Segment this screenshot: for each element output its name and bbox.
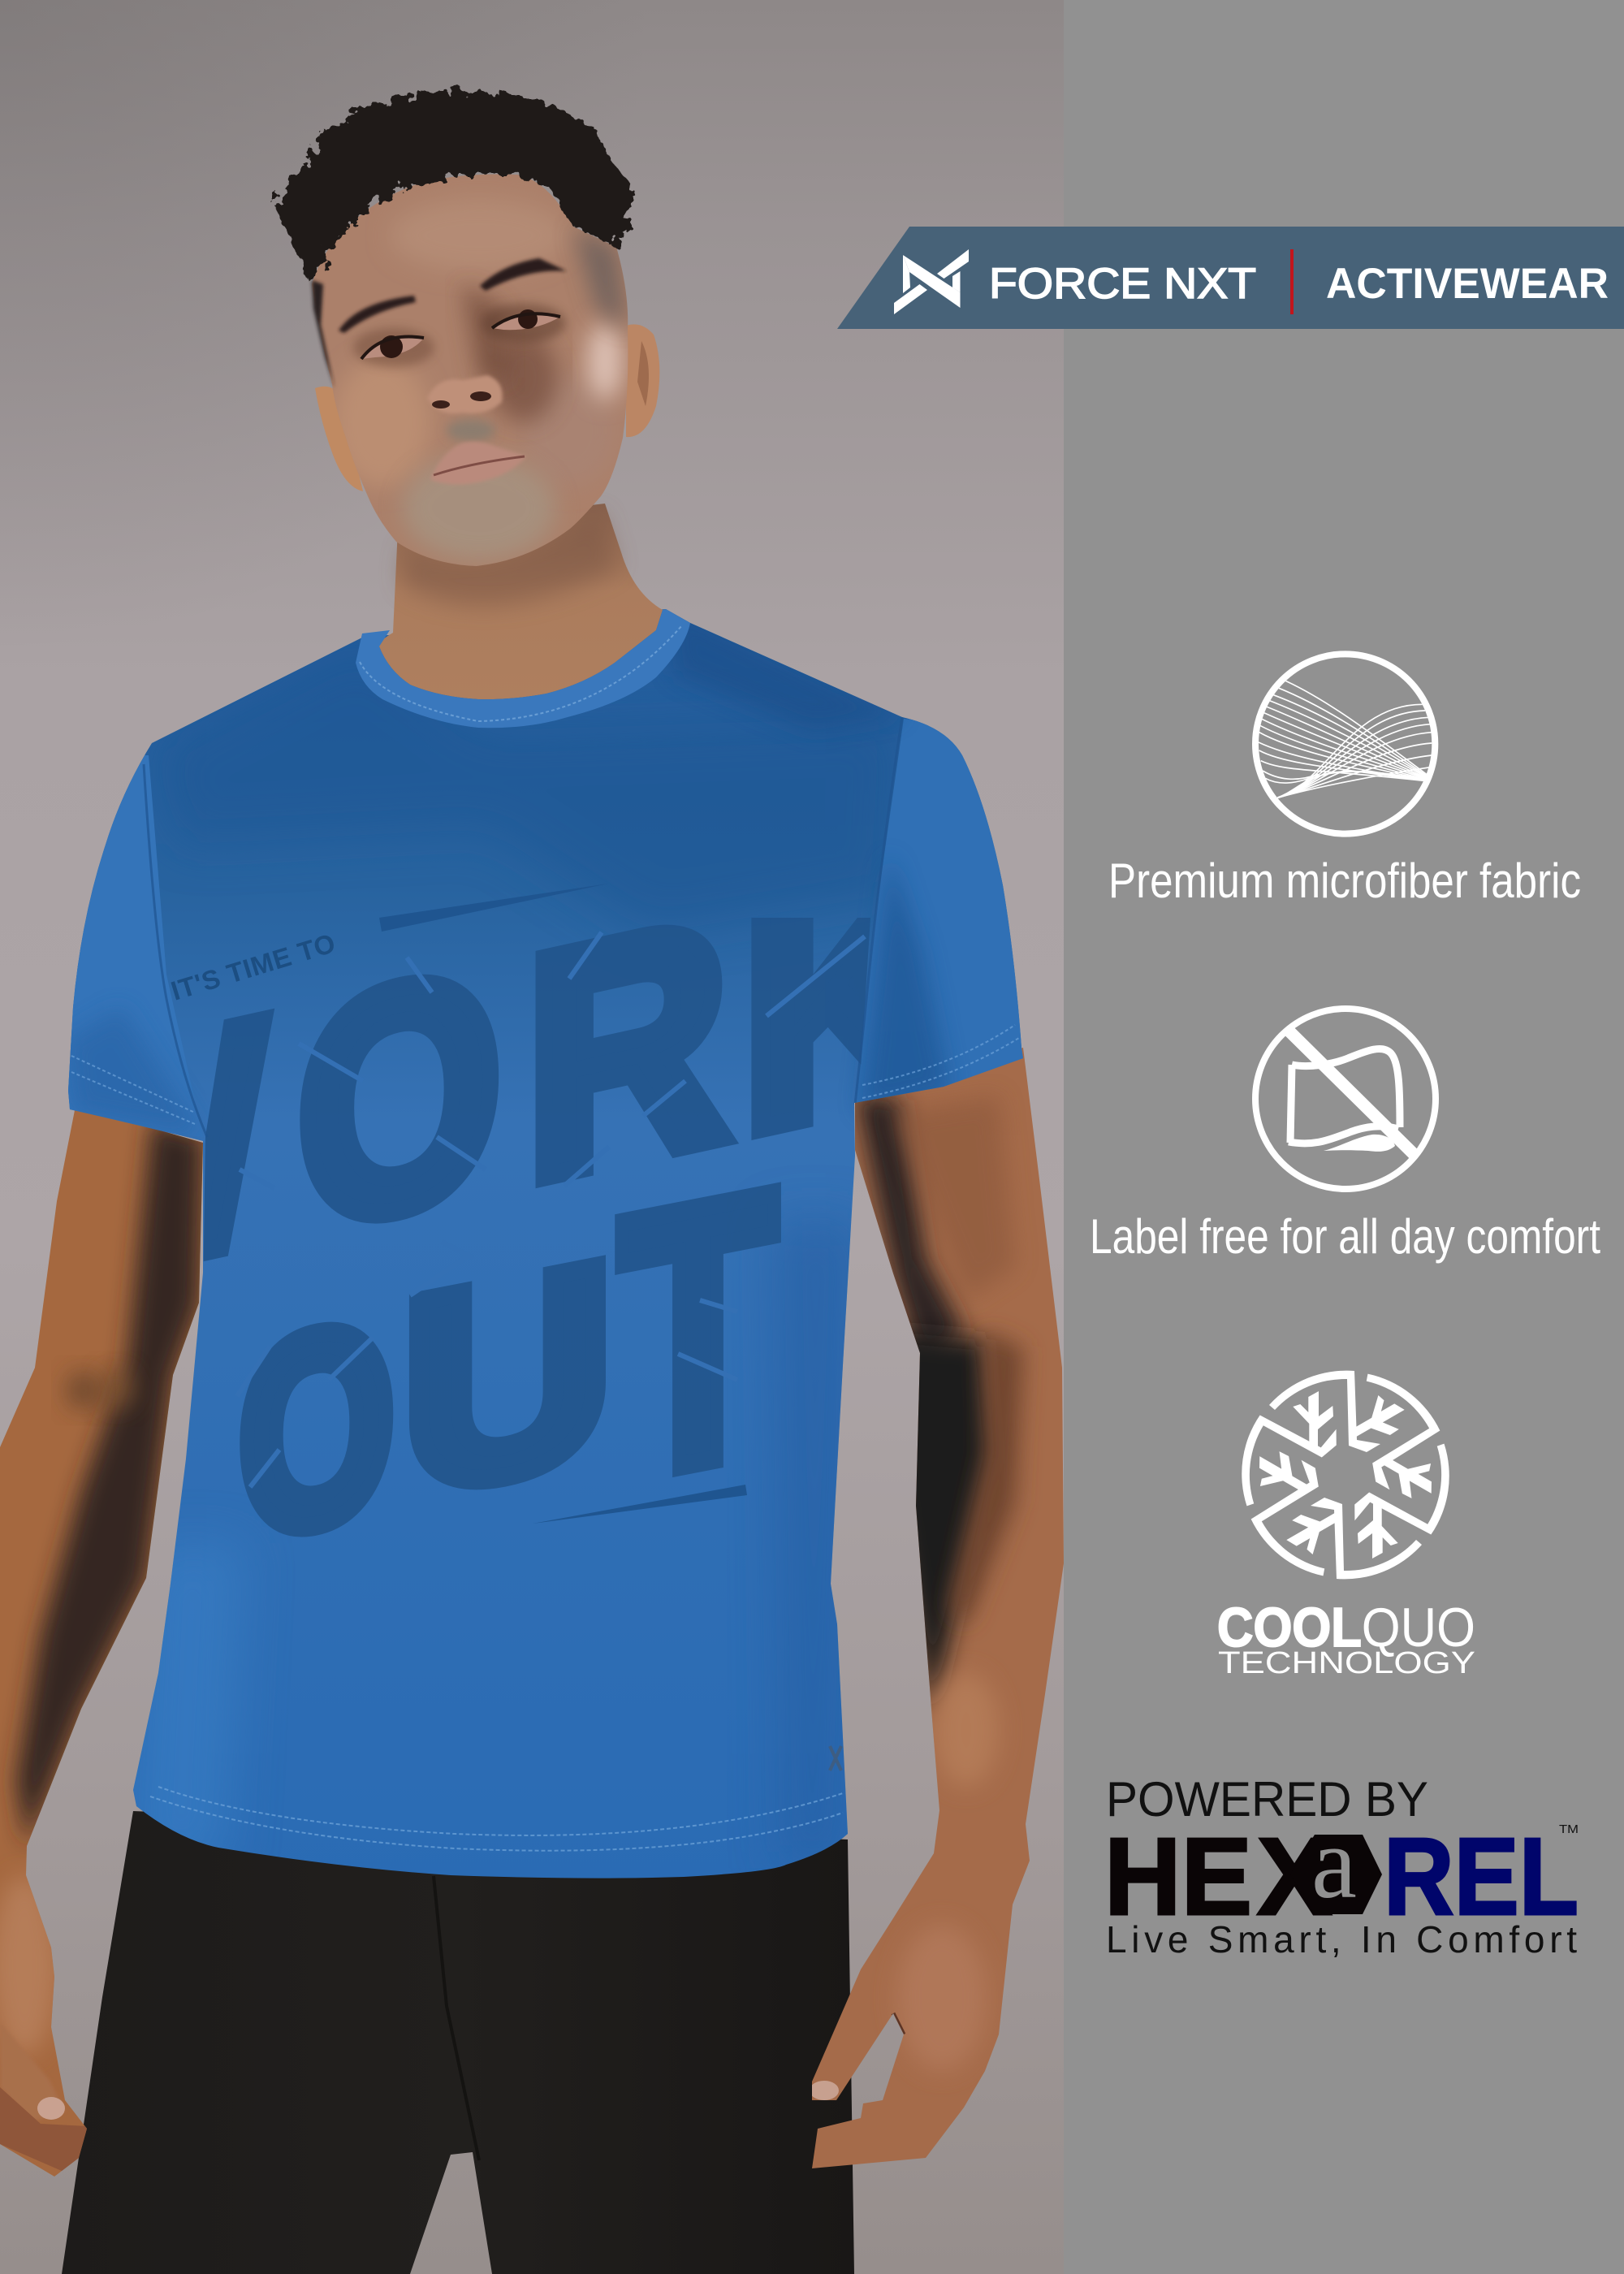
feature: microfiber	[1108, 654, 1581, 908]
print: tagline: IT'S TIME TO	[167, 927, 341, 1006]
print: swooshes	[379, 884, 747, 1524]
shirt shading	[49, 601, 1039, 1868]
t-shirt	[38, 601, 1039, 1900]
hexarel wordmark: REL	[1384, 1815, 1579, 1938]
logo: Force NXT mark	[894, 249, 969, 314]
print: WORK lettering: O	[297, 898, 502, 1298]
icon: snowflake wheel	[1217, 1356, 1474, 1593]
small chest logo on hem	[830, 1746, 841, 1770]
powered by text: POWERED BY	[1106, 1772, 1428, 1827]
banner: brand strip	[837, 227, 1624, 329]
lips	[430, 442, 526, 484]
category name: ACTIVEWEAR	[1326, 260, 1609, 308]
sleeve seams and stitching	[71, 717, 1019, 1851]
face	[300, 162, 641, 577]
feature: coolquo	[1217, 1356, 1475, 1680]
icon: crossed-out label	[1255, 1009, 1436, 1189]
left arm and hand	[0, 1088, 211, 2185]
shirt print	[203, 918, 870, 1537]
photo background	[0, 0, 1064, 2274]
print: OUT lettering: U	[402, 1204, 613, 1553]
print: fracture lines	[237, 932, 865, 1487]
hexarel wordmark: X	[1257, 1815, 1332, 1938]
right grey panel	[1064, 0, 1624, 2274]
brand name: FORCE NXT	[989, 260, 1256, 308]
powered by hexarel	[1104, 1772, 1579, 1961]
hexarel wordmark: a	[1311, 1807, 1357, 1920]
technology line: TECHNOLOGY	[1218, 1646, 1475, 1680]
collar	[356, 609, 690, 728]
hexarel wordmark	[1104, 1807, 1579, 1938]
icon: microfiber weave	[1255, 654, 1435, 834]
print: OUT lettering: T	[619, 1112, 777, 1557]
shorts	[62, 1811, 854, 2274]
tagline: Live Smart, In Comfort	[1106, 1918, 1577, 1961]
left eyebrow	[339, 296, 416, 333]
right eye	[492, 309, 560, 330]
ears	[315, 387, 363, 491]
right arm and hand	[810, 1040, 1072, 2177]
coolquo wordmark: COOLQUO	[1217, 1597, 1475, 1658]
left eye	[361, 335, 424, 359]
hexarel wordmark: TM	[1559, 1822, 1579, 1836]
print: WORK lettering: K	[741, 798, 958, 1200]
print: OUT lettering	[240, 1182, 781, 1537]
hair	[274, 90, 632, 284]
print: WORK lettering: W	[38, 952, 267, 1356]
right eyebrow	[480, 258, 567, 291]
print: OUT lettering: O	[239, 1261, 395, 1596]
red divider	[1290, 249, 1294, 314]
left sideburn fade	[312, 280, 335, 388]
print: WORK lettering	[203, 918, 870, 1261]
print: WORK lettering: R	[525, 850, 729, 1249]
photo: model	[0, 90, 1072, 2274]
nose	[427, 375, 503, 413]
head	[274, 90, 659, 577]
hexarel wordmark: HE	[1104, 1815, 1252, 1938]
feature: label free	[1090, 1009, 1600, 1264]
neck	[379, 504, 663, 699]
